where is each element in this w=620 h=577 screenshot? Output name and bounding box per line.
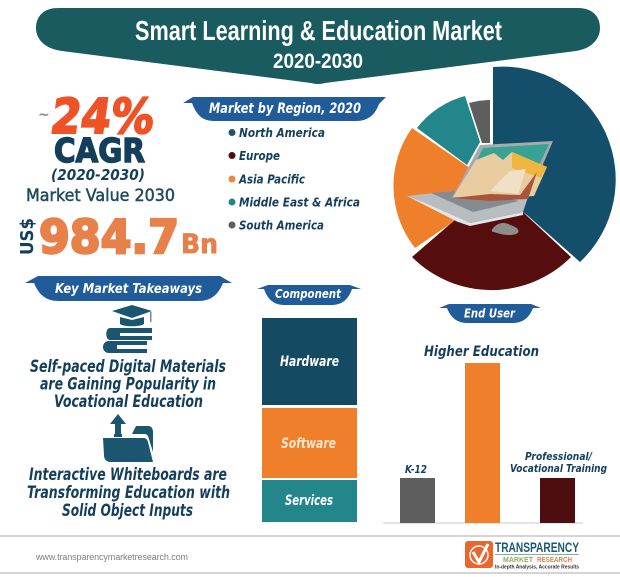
title banner: 2020-2030 (273, 50, 363, 73)
bar: higher education: Higher Education (424, 344, 539, 360)
legend: regions: Asia Pacific (238, 172, 305, 186)
market value 2030: Market Value 2030 (26, 186, 175, 206)
ribbon: component: Component (275, 286, 342, 301)
segment: software: Software (281, 436, 336, 452)
CAGR callout: 24% (47, 89, 158, 145)
stacked bar: component (262, 318, 357, 522)
legend: regions: South America (239, 218, 324, 232)
segment: services: Services (285, 493, 333, 509)
title banner (36, 8, 600, 84)
CAGR callout (38, 89, 158, 184)
pie slice: north america (493, 67, 616, 262)
icon: folder with upload arrow (103, 414, 153, 462)
icon: laptop with book (407, 141, 553, 235)
segment: services (262, 480, 357, 522)
bar: k-12 (400, 464, 435, 523)
bar: professional and vocational training (510, 450, 607, 523)
pie chart: market by region (393, 67, 616, 290)
takeaway text: interactive whiteboards: Transforming Education with (27, 483, 230, 502)
market value 2030 (17, 186, 218, 264)
bar: professional and vocational training: Professional/ (525, 450, 593, 463)
footer logo: transparency market research: TRANSPARENCY (495, 539, 579, 555)
market value 2030: US$ (17, 218, 38, 255)
pie slice: asia pacific (393, 128, 480, 248)
footer logo: transparency market research (465, 539, 579, 570)
icon: graduation cap and books (103, 305, 152, 353)
ribbon: market by region: Market by Region, 2020 (209, 101, 361, 117)
ribbon: end user (439, 304, 541, 323)
CAGR callout: CAGR (54, 131, 145, 170)
bar: higher education (424, 344, 539, 523)
ribbon: market by region (183, 97, 386, 121)
segment: hardware: Hardware (280, 354, 339, 370)
segment: hardware (262, 318, 357, 405)
legend: regions: Middle East & Africa (239, 196, 360, 210)
pie slice: europe (412, 190, 571, 290)
takeaway text: self-paced digital materials: Vocational Education (54, 392, 203, 411)
legend: regions: Europe (239, 149, 280, 163)
takeaway text: self-paced digital materials: are Gaining Popularity in (40, 374, 216, 394)
footer logo: transparency market research: RESEARCH (537, 557, 572, 564)
ribbon: key market takeaways (25, 276, 232, 301)
market value 2030: Bn (181, 229, 218, 260)
takeaway text: interactive whiteboards: Interactive Whiteboards are (29, 465, 227, 484)
market value 2030: 984.7 (39, 210, 179, 264)
ribbon: component (257, 285, 361, 305)
icon: orange check badge (465, 541, 493, 568)
pie slice: south america (469, 100, 490, 143)
pie slice: middle east and africa (417, 96, 480, 165)
footer logo: transparency market research: MARKET (503, 557, 534, 564)
takeaway text: interactive whiteboards (27, 465, 230, 520)
legend: regions: North America (239, 126, 325, 140)
footer logo: transparency market research: In-depth Analysis, Accurate Results (495, 564, 579, 570)
bar: k-12: K-12 (405, 464, 427, 476)
takeaway text: interactive whiteboards: Solid Object Inputs (62, 501, 193, 520)
takeaway text: self-paced digital materials (30, 357, 226, 411)
bar chart: end user (383, 344, 607, 524)
CAGR callout: ~ (38, 107, 50, 123)
takeaway text: self-paced digital materials: Self-paced Digital Materials (30, 357, 226, 376)
title banner: Smart Learning & Education Market (135, 15, 502, 46)
legend: regions (228, 126, 360, 232)
segment: software (262, 408, 357, 478)
ribbon: key market takeaways: Key Market Takeaways (55, 281, 202, 297)
ribbon: end user: End User (464, 306, 516, 320)
CAGR callout: (2020-2030) (51, 166, 145, 184)
footer url: www.transparencymarketresearch.com (35, 552, 188, 562)
